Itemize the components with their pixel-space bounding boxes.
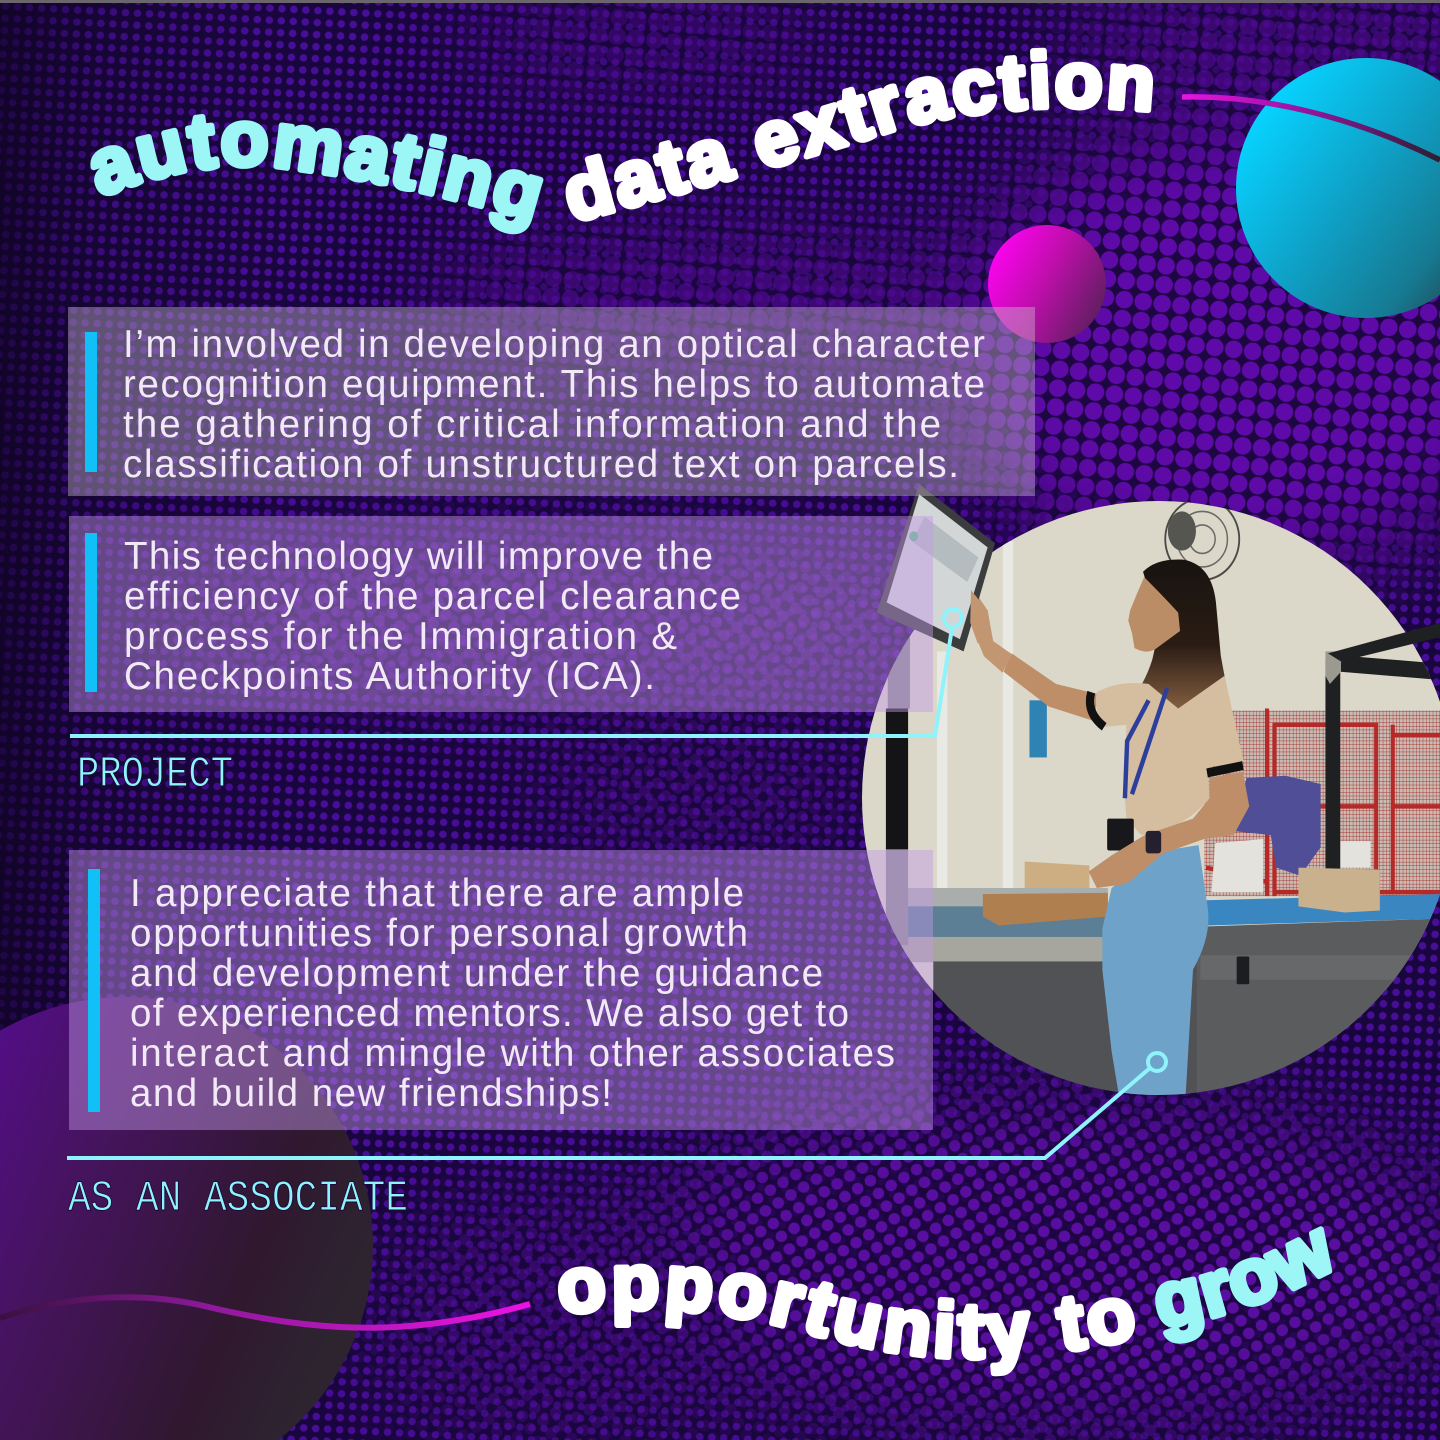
green status dot [909,531,918,541]
machine body [933,961,1200,1133]
blue conveyor [1206,894,1440,926]
paragraph [123,323,985,486]
machine body right [1197,919,1440,1133]
paragraph: I’m involved in developing an optical character [123,323,985,366]
paragraph: of experienced mentors. We also get to [130,992,849,1035]
monitor pole [886,619,910,945]
paragraph: classification of unstructured text on parcels. [123,443,959,486]
magenta curve top right [1182,97,1440,160]
title words: data extraction: data extraction [566,48,1154,222]
label: PROJECT: PROJECT [77,750,233,800]
paragraph [130,872,895,1115]
pole black section [886,708,908,849]
monitor frame [877,484,995,651]
jeans [1102,845,1208,1096]
paragraph: and build new friendships! [130,1072,612,1115]
lanyard [1125,688,1167,798]
blue wall sign [1029,700,1047,757]
roll cages [1204,708,1440,896]
heading word: grow: grow [1155,1226,1332,1344]
machine switch [1237,957,1249,984]
raised fingers [970,590,992,643]
bags in cage [1232,776,1321,876]
smart watch [1146,831,1161,853]
decorative sphere lower left [0,997,373,1440]
steel frame [1333,660,1440,872]
circular photo: operator at parcel scanner [856,480,1440,1133]
rollers [901,906,1108,939]
paragraph: Checkpoints Authority (ICA). [124,655,655,698]
accent bar [88,869,100,1112]
wall fan [1165,498,1239,580]
magenta curve bottom left [0,1297,530,1328]
vent panel [1200,955,1415,980]
brown carton [983,893,1108,926]
heading words: opportunity to: opportunity to [558,1264,1136,1376]
touchscreen monitor [877,484,1440,662]
lower rail [901,937,1108,962]
ID badge [1107,819,1134,850]
wall pipes [942,541,1008,888]
project connector line [70,609,962,736]
panel background [69,850,933,1130]
paragraph: I appreciate that there are ample [130,872,744,915]
back box [1024,862,1090,888]
paragraph: This technology will improve the [124,535,713,578]
hand [970,588,1012,673]
roller rail [908,888,1108,906]
white parcels in cage [1212,839,1371,892]
text panel: OCR development [68,307,1035,496]
panel background [68,307,1035,496]
magenta sphere [988,225,1106,343]
paragraph: opportunities for personal growth [130,912,748,955]
panel background [69,516,933,712]
paragraph [124,535,741,698]
upright rail top [1325,651,1341,684]
sleeve cuffs [1090,692,1243,773]
shirt [1096,676,1244,835]
paragraph: process for the Immigration & [124,615,677,658]
raised arm [1004,653,1099,721]
text panel: associate experience [69,850,933,1130]
title word: automating: automating [90,114,544,234]
forearm and hand [1089,772,1249,888]
accent bar [85,332,97,472]
frame bar popping out of circle [1328,623,1440,662]
title: automating data extraction [90,48,1154,234]
right carton [1298,868,1380,912]
text panel: ICA efficiency [69,516,933,712]
accent bar [85,533,97,692]
wall [856,480,1440,990]
heading: opportunity to grow [558,1226,1332,1376]
paragraph: efficiency of the parcel clearance [124,575,741,618]
cyan planet [1236,58,1440,318]
paragraph: interact and mingle with other associates [130,1032,895,1075]
paragraph: the gathering of critical information and the [123,403,941,446]
paragraph: and development under the guidance [130,952,823,995]
face [1128,577,1180,652]
paragraph: recognition equipment. This helps to automate [123,363,985,406]
top grey edge strip [0,0,1440,3]
label: AS AN ASSOCIATE: AS AN ASSOCIATE [68,1174,408,1224]
hair [1126,559,1227,715]
associate connector line [67,1053,1166,1158]
screen content [912,517,978,582]
monitor screen [887,494,988,639]
